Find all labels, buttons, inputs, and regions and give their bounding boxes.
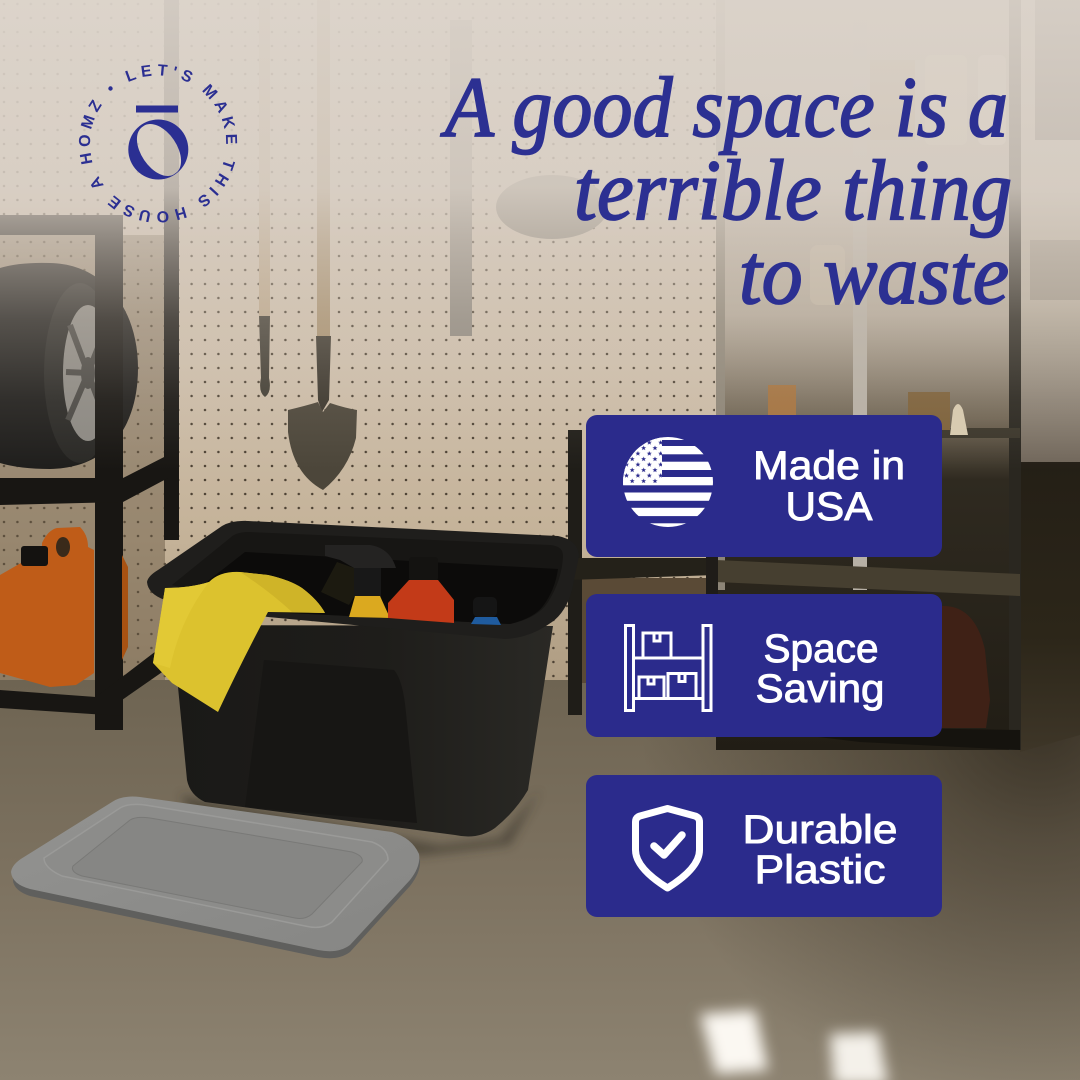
badge: Durable Plastic <box>586 775 942 917</box>
label: Durable Plastic: Plastic <box>754 848 886 892</box>
label: Durable Plastic: Durable <box>742 808 898 852</box>
tub inner step <box>190 552 558 624</box>
label: Made in USA: USA <box>786 485 873 529</box>
spray bottle <box>321 545 396 618</box>
yellow towel <box>153 572 325 712</box>
tub body <box>172 625 553 836</box>
tire <box>0 263 138 469</box>
blue bottle <box>471 597 501 625</box>
hanging tool: long handle <box>259 0 270 397</box>
headline line 2: terrible thing <box>574 142 1012 238</box>
garage wall <box>0 0 1080 720</box>
hanging tool: third handle <box>450 20 472 336</box>
left metal shelving <box>0 0 179 730</box>
tub floor shadow <box>180 790 540 856</box>
tub panel recess <box>245 660 417 823</box>
red bottle <box>388 557 454 623</box>
right shelving unit <box>716 0 1080 750</box>
floor shade toward the right <box>0 680 1080 1080</box>
label: Made in USA <box>753 444 905 529</box>
pegboard <box>0 0 715 700</box>
storage tub <box>147 521 579 836</box>
towel back flap <box>153 582 209 668</box>
icon: shield with check <box>636 808 700 888</box>
floor reflections <box>700 1010 888 1080</box>
towel fold shade <box>240 572 325 613</box>
logo o mark <box>128 120 188 180</box>
middle dark rack <box>568 430 718 715</box>
label: Space Saving: Saving <box>756 667 884 711</box>
right wall section <box>1020 0 1080 465</box>
label: Space Saving <box>756 627 884 711</box>
top fog overlay <box>0 0 1080 470</box>
slogan dot <box>108 86 113 91</box>
logo bar <box>136 106 178 112</box>
floor <box>0 680 1080 1080</box>
orange jug <box>0 527 128 687</box>
headline line 1: A good space is a <box>440 59 1008 155</box>
hanging tool: shovel <box>288 0 357 490</box>
shaded wall inside left shelf <box>0 235 165 695</box>
label: Made in USA: Made in <box>753 444 905 488</box>
hanging lamp shape <box>496 175 608 239</box>
badge: Made in USA <box>586 415 942 557</box>
dark back of right alcove <box>1020 462 1080 752</box>
label: Space Saving: Space <box>764 627 878 671</box>
badge: Space Saving <box>586 594 942 737</box>
tub lid <box>11 797 420 958</box>
label: Durable Plastic <box>742 808 898 892</box>
headline <box>440 59 1012 322</box>
headline line 3: to waste <box>739 226 1009 322</box>
tub rim <box>147 521 579 639</box>
icon: shelves with boxes <box>626 626 711 710</box>
icon: US flag <box>620 436 716 528</box>
logo badge <box>78 64 238 222</box>
circular slogan: LET'S MAKE THIS HOUSE A HOMZ <box>78 64 238 222</box>
tub interior <box>172 532 563 624</box>
